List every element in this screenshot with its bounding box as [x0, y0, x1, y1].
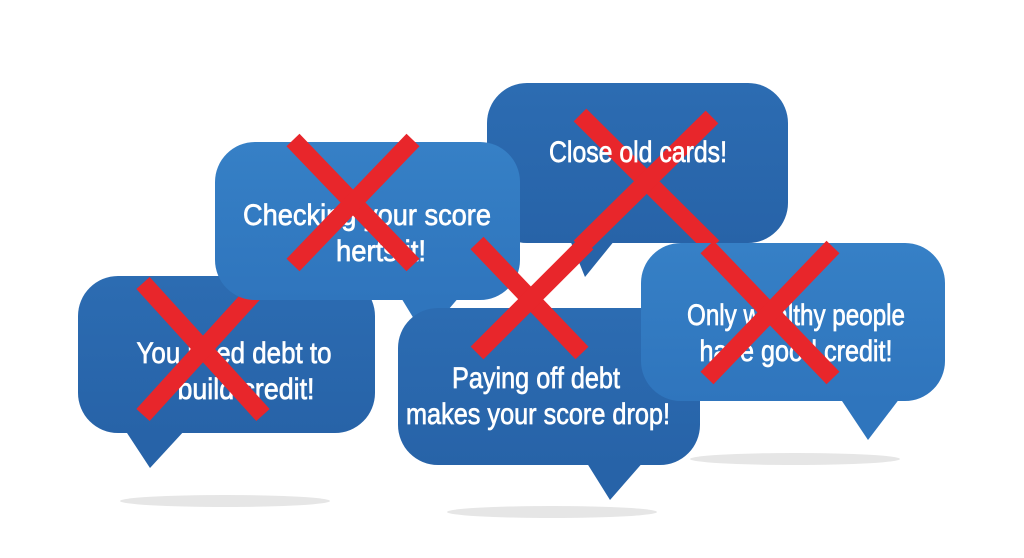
bubble: paying off debt: Paying off debt	[452, 362, 621, 395]
bubble: paying off debt	[398, 243, 700, 500]
bubble: you need debt: You need debt to	[136, 337, 332, 370]
bubble: you need debt: build credit!	[178, 373, 314, 406]
bubble: only wealthy people: have good credit!	[700, 335, 892, 368]
bubble: checking your score	[215, 140, 520, 337]
bubble: paying off debt: makes your score drop!	[406, 398, 670, 431]
bubble: checking your score: Checking your score	[243, 199, 491, 232]
bubble: checking your score: herts it!	[336, 235, 426, 268]
bubble: you need debt	[78, 276, 375, 468]
shadows	[120, 453, 900, 518]
bubble: close old cards	[487, 83, 788, 277]
bubble: only wealthy people: Only wealthy people	[687, 299, 905, 332]
bubble: close old cards: Close old cards!	[549, 136, 727, 169]
bubble: only wealthy people	[641, 243, 945, 440]
